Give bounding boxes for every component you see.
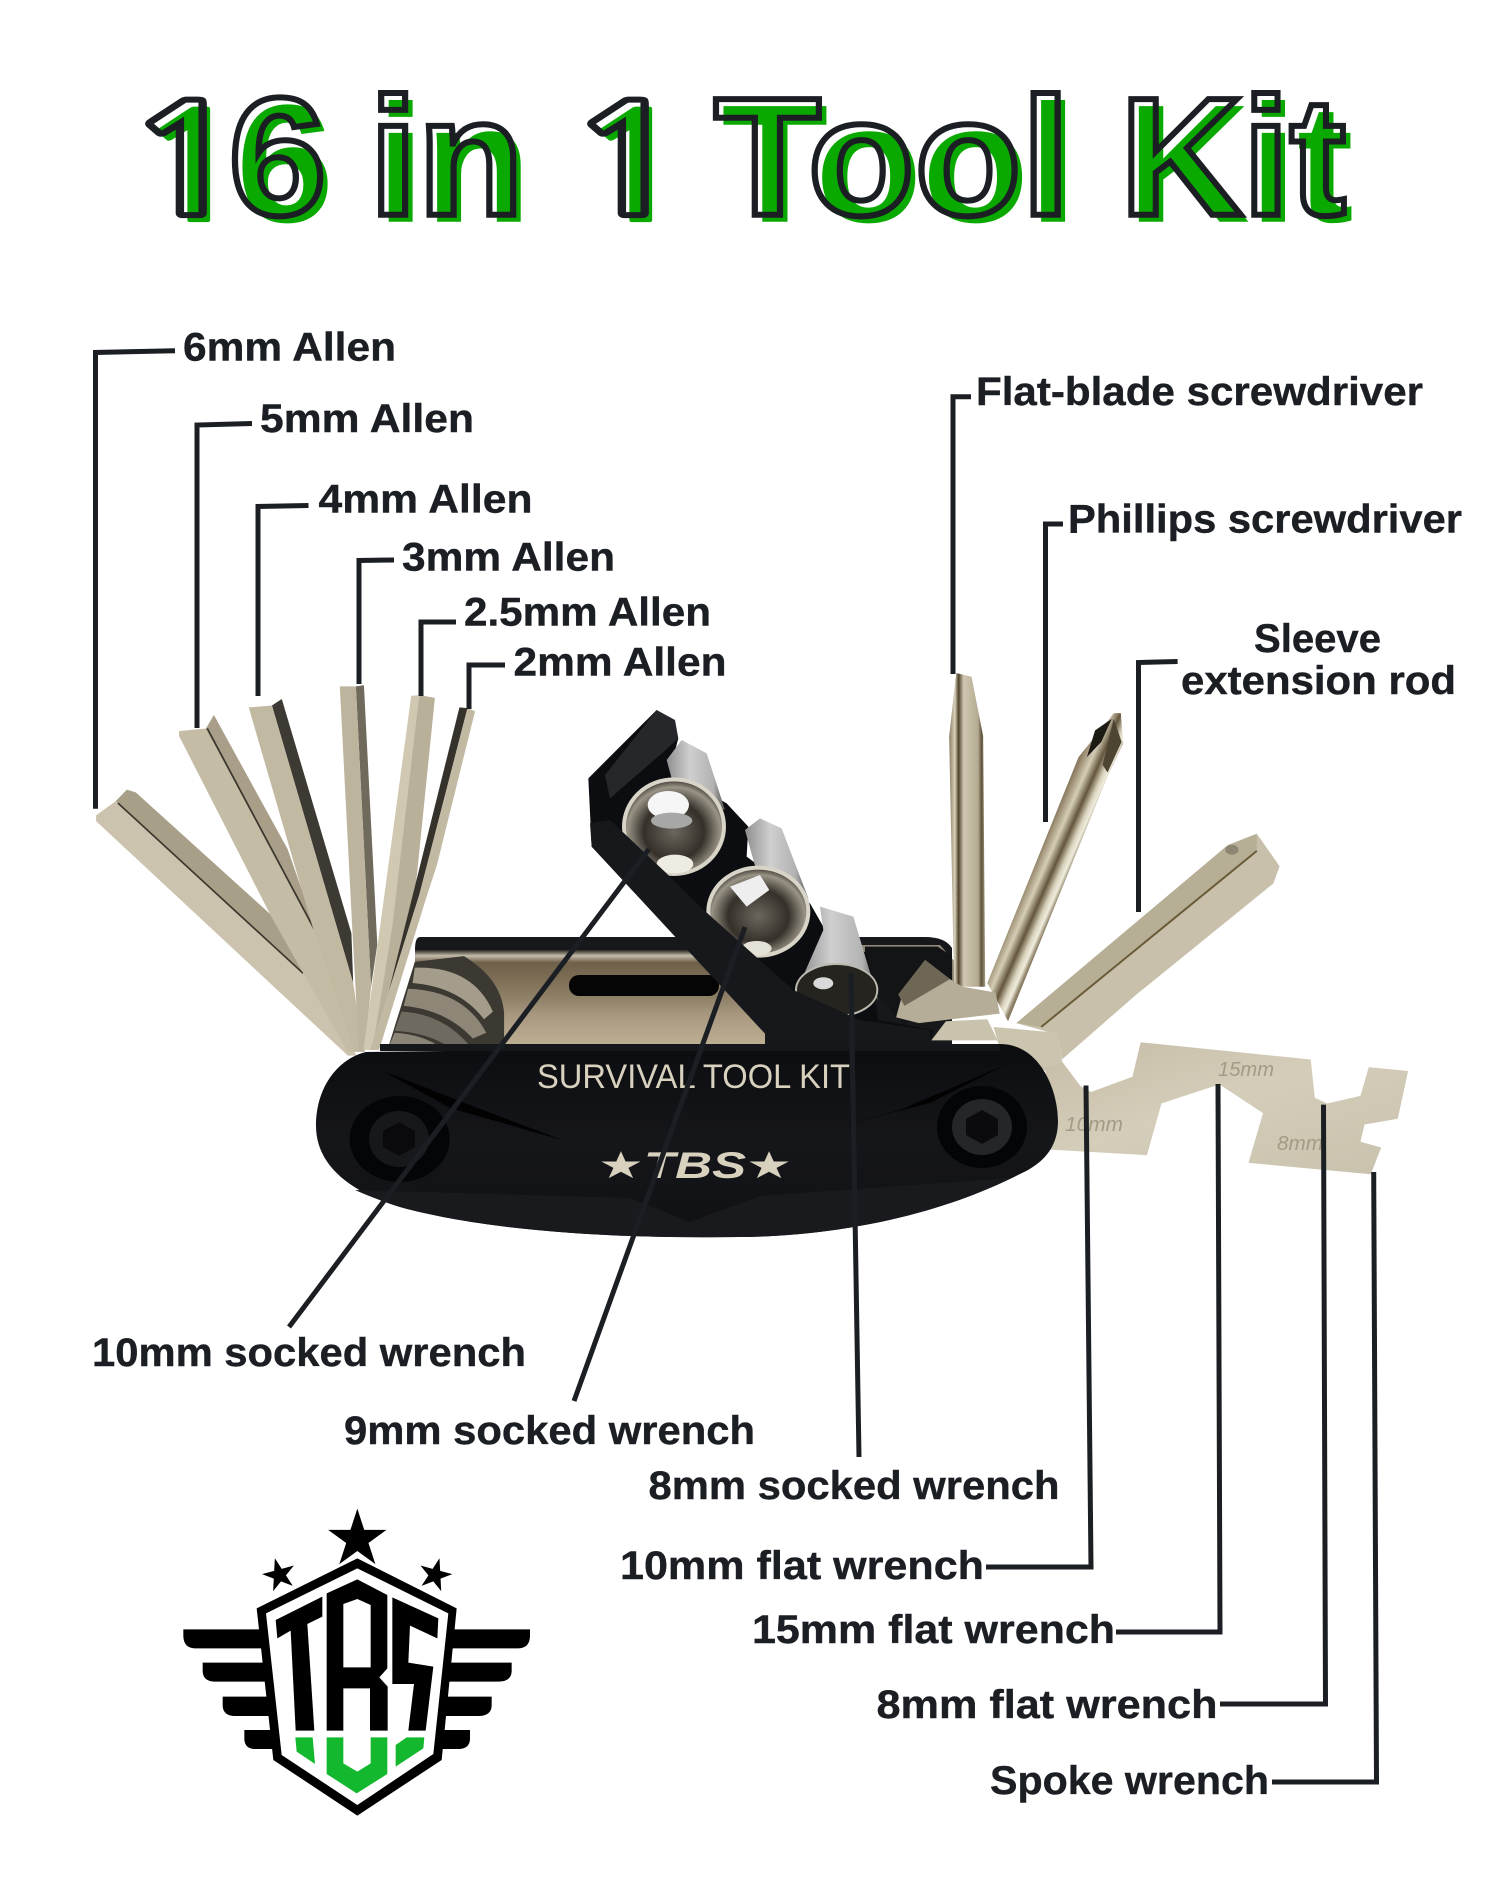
9mm socket — [708, 818, 808, 956]
title: Kit — [1120, 63, 1346, 251]
wrench engraving: 10mm — [1065, 1114, 1123, 1136]
label: 15mm flat wrench: 15mm flat wrench — [752, 1608, 1115, 1652]
label: 2mm Allen: 2mm Allen — [514, 641, 726, 685]
left bolt — [350, 1096, 450, 1182]
wrench engraving — [1065, 1059, 1323, 1155]
label: Phillips screwdriver: Phillips screwdriver — [1068, 498, 1462, 542]
title: Tool — [714, 63, 1070, 251]
multi-tool illustration — [96, 673, 1408, 1237]
label: Spoke wrench — [990, 1172, 1376, 1803]
metal loop — [865, 947, 952, 1025]
label: 8mm flat wrench — [876, 1105, 1326, 1727]
label: 3mm Allen: 3mm Allen — [402, 536, 615, 580]
arm front bevel — [590, 820, 930, 1043]
label: Flat-blade screwdriver: Flat-blade screwdriver — [976, 370, 1423, 414]
title — [122, 63, 1354, 258]
wrench engraving: 8mm — [1277, 1133, 1323, 1155]
label: 10mm flat wrench — [620, 1086, 1091, 1588]
title: Tool — [722, 70, 1078, 258]
label: 2.5mm Allen — [421, 591, 711, 696]
logo letters TRS — [276, 1579, 438, 1731]
label: 10mm flat wrench: 10mm flat wrench — [620, 1544, 984, 1588]
4mm allen key — [249, 699, 363, 1052]
8mm socket — [796, 907, 878, 1016]
label: 3mm Allen — [359, 536, 615, 684]
label: 9mm socked wrench — [344, 927, 755, 1453]
label: 2mm Allen — [469, 641, 726, 709]
front plate — [316, 1044, 1058, 1237]
label: 4mm Allen — [258, 478, 532, 696]
title: 1 — [564, 87, 693, 238]
socket wrench arm — [588, 710, 933, 1043]
label: Sleeve extension rod: Sleeve — [1254, 617, 1381, 661]
phillips screwdriver — [987, 713, 1123, 1021]
logo: TRS shield — [183, 1509, 530, 1816]
wrench engraving: 15mm — [1218, 1059, 1274, 1081]
metal bits — [896, 960, 1062, 1067]
plate logo text: ★TBS★ — [598, 1145, 792, 1186]
title: 6 — [228, 63, 326, 251]
label: 6mm Allen — [96, 326, 396, 809]
title: 1 — [572, 94, 700, 245]
title: in — [376, 70, 532, 258]
label: 4mm Allen: 4mm Allen — [318, 478, 532, 522]
allen keys — [96, 685, 504, 1056]
tools on the right — [865, 673, 1408, 1174]
flat wrench — [998, 1035, 1408, 1174]
3mm allen key — [340, 685, 377, 1052]
label: Spoke wrench: Spoke wrench — [990, 1759, 1269, 1803]
title: Kit — [1128, 70, 1354, 258]
logo stars — [259, 1509, 455, 1593]
title: 6 — [236, 70, 334, 258]
flat-blade screwdriver — [949, 673, 985, 987]
label: 5mm Allen — [197, 397, 474, 728]
label: 6mm Allen: 6mm Allen — [183, 326, 396, 370]
logo wings — [183, 1629, 530, 1749]
right bolt — [937, 1086, 1027, 1168]
label: Phillips screwdriver — [1046, 498, 1462, 822]
2mm allen key — [370, 707, 475, 1050]
title: in — [369, 63, 524, 251]
label: 8mm socked wrench: 8mm socked wrench — [648, 1464, 1060, 1508]
label: 2.5mm Allen: 2.5mm Allen — [464, 591, 711, 635]
label: 10mm socked wrench: 10mm socked wrench — [92, 1331, 526, 1375]
label: 8mm flat wrench: 8mm flat wrench — [876, 1683, 1218, 1727]
arm back — [588, 710, 933, 1042]
label: 9mm socked wrench: 9mm socked wrench — [344, 1409, 755, 1453]
2.5mm allen key — [363, 695, 435, 1050]
plate brand text: SURVIVAL TOOL KIT — [537, 1058, 850, 1096]
label: 5mm Allen: 5mm Allen — [260, 397, 474, 441]
6mm allen key — [96, 790, 357, 1056]
logo shield — [257, 1558, 457, 1816]
label: 10mm socked wrench — [92, 849, 649, 1375]
title: 1 — [130, 94, 258, 245]
back plate — [415, 937, 955, 1050]
10mm socket — [624, 740, 725, 874]
label: Sleeve extension rod: extension rod — [1181, 659, 1456, 703]
label: 15mm flat wrench — [752, 1084, 1220, 1652]
sleeve extension rod — [1016, 834, 1280, 1059]
label: Flat-blade screwdriver — [953, 370, 1423, 674]
5mm allen key — [179, 715, 357, 1052]
washers — [388, 956, 504, 1048]
title: 1 — [122, 87, 251, 238]
label: Sleeve extension rod — [1138, 617, 1456, 912]
logo green V — [295, 1737, 424, 1793]
label: 8mm socked wrench — [648, 973, 1060, 1508]
